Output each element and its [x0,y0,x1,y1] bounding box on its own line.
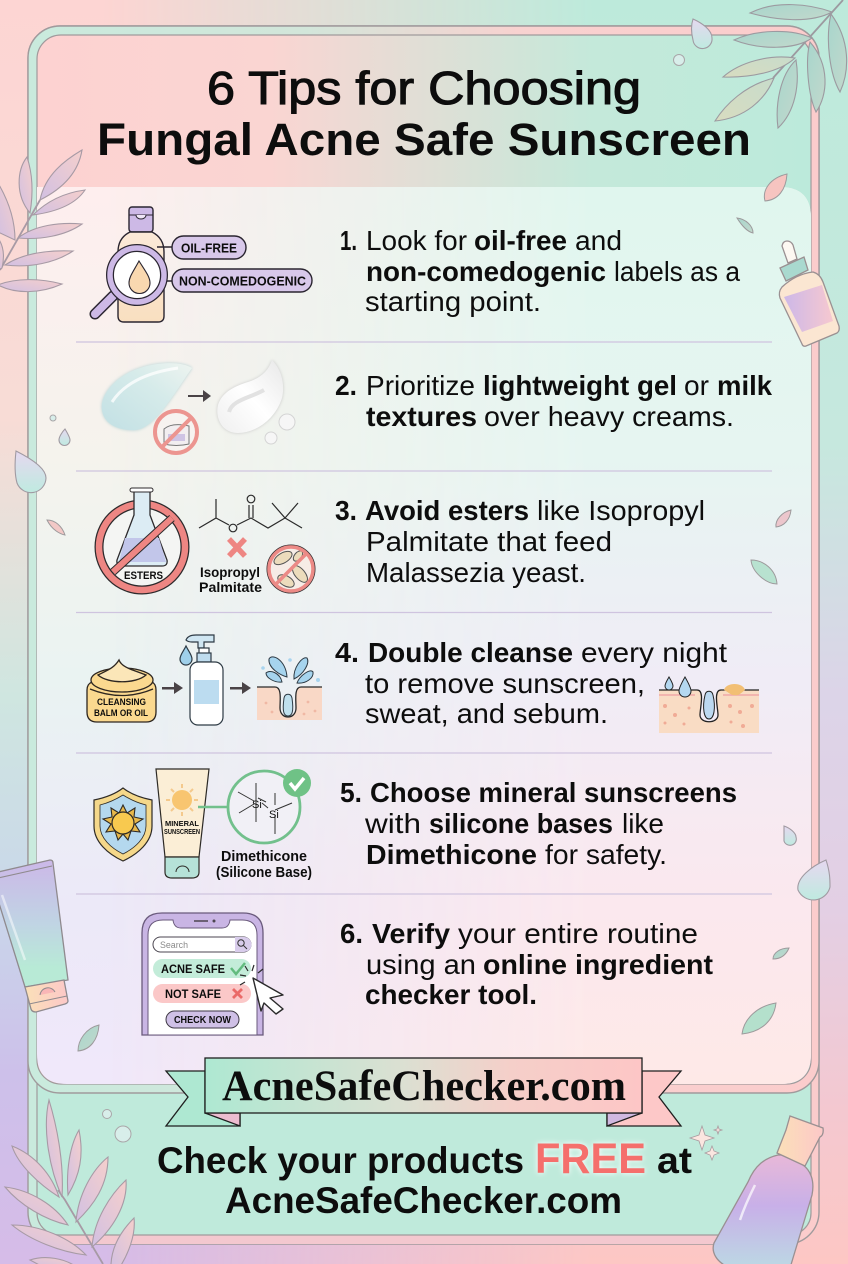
tip 4 text: Double cleanse [368,637,573,668]
tip 1 text: labels as a [614,256,740,287]
tip 5 text: Choose mineral sunscreens [370,777,737,808]
icon: isopropyl palmitate molecule [199,495,302,595]
tip 6 text: 6. [340,918,363,949]
tip 2 text: textures [366,401,477,432]
tip 6 text: Verify [372,918,450,949]
tip 1 text: starting point. [365,286,541,317]
call to action: Check your products [157,1140,524,1181]
tip 2 text [335,370,772,432]
tip 2 text: Prioritize [366,370,475,401]
title: 6 Tips for Choosing [207,62,641,114]
tip 4 text: sweat, and sebum. [365,698,608,729]
decoration: dropper bottle [779,241,839,346]
banner: site name: AcneSafeChecker.com [222,1063,626,1110]
tip 1 text: Look for [366,225,467,256]
label: oil-free [172,236,246,259]
tip 3 text: 3. [335,495,357,526]
tip 6 text: using an [366,949,476,980]
icon: mineral sunscreen tube: SUNSCREEN [164,829,200,836]
label: non-comedogenic: NON-COMEDOGENIC [179,274,306,288]
icon: isopropyl palmitate molecule: Palmitate [199,579,262,595]
tip 6 text: your entire routine [458,918,698,949]
icon: bottle with magnifier and labels [95,207,312,322]
call to action: FREE [535,1135,646,1183]
cursor [240,965,283,1014]
call to action: FREE [535,1135,646,1183]
decoration: left branch [0,150,85,292]
panel: tips background [37,187,811,1084]
tip 5 text: for safety. [545,839,667,870]
call to action: AcneSafeChecker.com [225,1180,622,1221]
tip 6 text: online ingredient [483,949,713,980]
icon: mineral sunscreen tube: MINERAL [165,821,200,828]
tip 5 text: Dimethicone [366,839,537,870]
tip 2 text: or [684,370,709,401]
icon: esters prohibited flask [99,488,185,590]
icon: skin pore with sebum [659,677,759,733]
title [97,62,751,165]
decoration: tube [0,860,68,1012]
tip 2 text: lightweight gel [483,370,677,401]
button: check now [166,1011,239,1028]
icon: dimethicone molecule: Dimethicone [221,849,307,865]
decoration: bottom left branch [5,1100,134,1264]
tip 1 text: oil-free [474,225,567,256]
tip 1 text [340,225,740,317]
result: not safe: NOT SAFE [165,989,221,1001]
icon: dimethicone molecule: Si [269,809,279,821]
tip 4 text: every night [581,637,727,668]
decoration: water drops [15,19,830,900]
arrow [162,682,183,694]
tip 3 text: like Isopropyl [537,495,705,526]
tip 5 text: 5. [340,777,362,808]
decoration: top right branch [715,0,847,128]
decoration: floating leaves [47,174,791,1051]
search bar [153,937,252,952]
icon: gel to milk textures [102,360,295,453]
tip 4 text: 4. [335,637,359,668]
tip 3 text: Malassezia yeast. [366,557,586,588]
label: non-comedogenic [172,269,312,292]
tip 4 text [335,637,727,729]
icon: skin pore splash [257,657,322,720]
tip 3 text: Palmitate that feed [366,526,612,557]
button: check now: CHECK NOW [174,1015,232,1026]
title: Fungal Acne Safe Sunscreen [97,114,751,165]
tip 2 text: over heavy creams. [484,401,734,432]
icon: no heavy cream jar [155,411,197,453]
icon: cleansing balm jar: BALM OR OIL [94,708,148,719]
tip 1 text: and [575,225,622,256]
banner: site name [166,1058,681,1126]
tip 2 text: milk [717,370,772,401]
icon: cleansing balm jar [87,660,156,722]
icon: dimethicone molecule: (Silicone Base) [216,865,312,881]
tip 5 text: silicone bases [429,808,613,839]
tip 5 text: with [364,808,421,839]
tip 1 text: 1. [340,225,357,256]
call to action: at [657,1140,692,1181]
icon: phone with ingredient checker [142,913,283,1035]
tip 6 text: checker tool. [365,979,537,1010]
icon: sun shield [94,788,152,861]
icon: pump cleanser bottle [180,635,223,725]
dividers [76,342,772,894]
search bar: Search [160,940,188,950]
icon: no yeast [267,545,315,593]
result: not safe [153,984,251,1003]
icon: mineral sunscreen tube [156,769,209,878]
tip 5 text: like [622,808,664,839]
decoration: sparkles [690,1126,722,1160]
tip 5 text [340,777,737,870]
icon: dimethicone molecule [198,769,312,881]
arrow [230,682,251,694]
label: oil-free: OIL-FREE [181,242,237,256]
icon: dimethicone molecule: Si [252,799,262,811]
call to action [157,1135,692,1221]
result: acne safe: ACNE SAFE [161,964,225,976]
decoration: bottom right bottle [713,1116,823,1264]
result: acne safe [153,959,251,978]
tip 6 text [340,918,713,1010]
tip 1 text: non-comedogenic [366,256,606,287]
decoration: bubbles [50,54,684,1142]
icon: cleansing balm jar: CLEANSING [97,697,146,708]
tip 4 text: to remove sunscreen, [365,668,645,699]
icon: esters prohibited flask: ESTERS [124,570,163,582]
tip 2 text: 2. [335,370,357,401]
tip 3 text [335,495,705,588]
icon: isopropyl palmitate molecule: Isopropyl [200,564,260,580]
tip 3 text: Avoid esters [365,495,529,526]
